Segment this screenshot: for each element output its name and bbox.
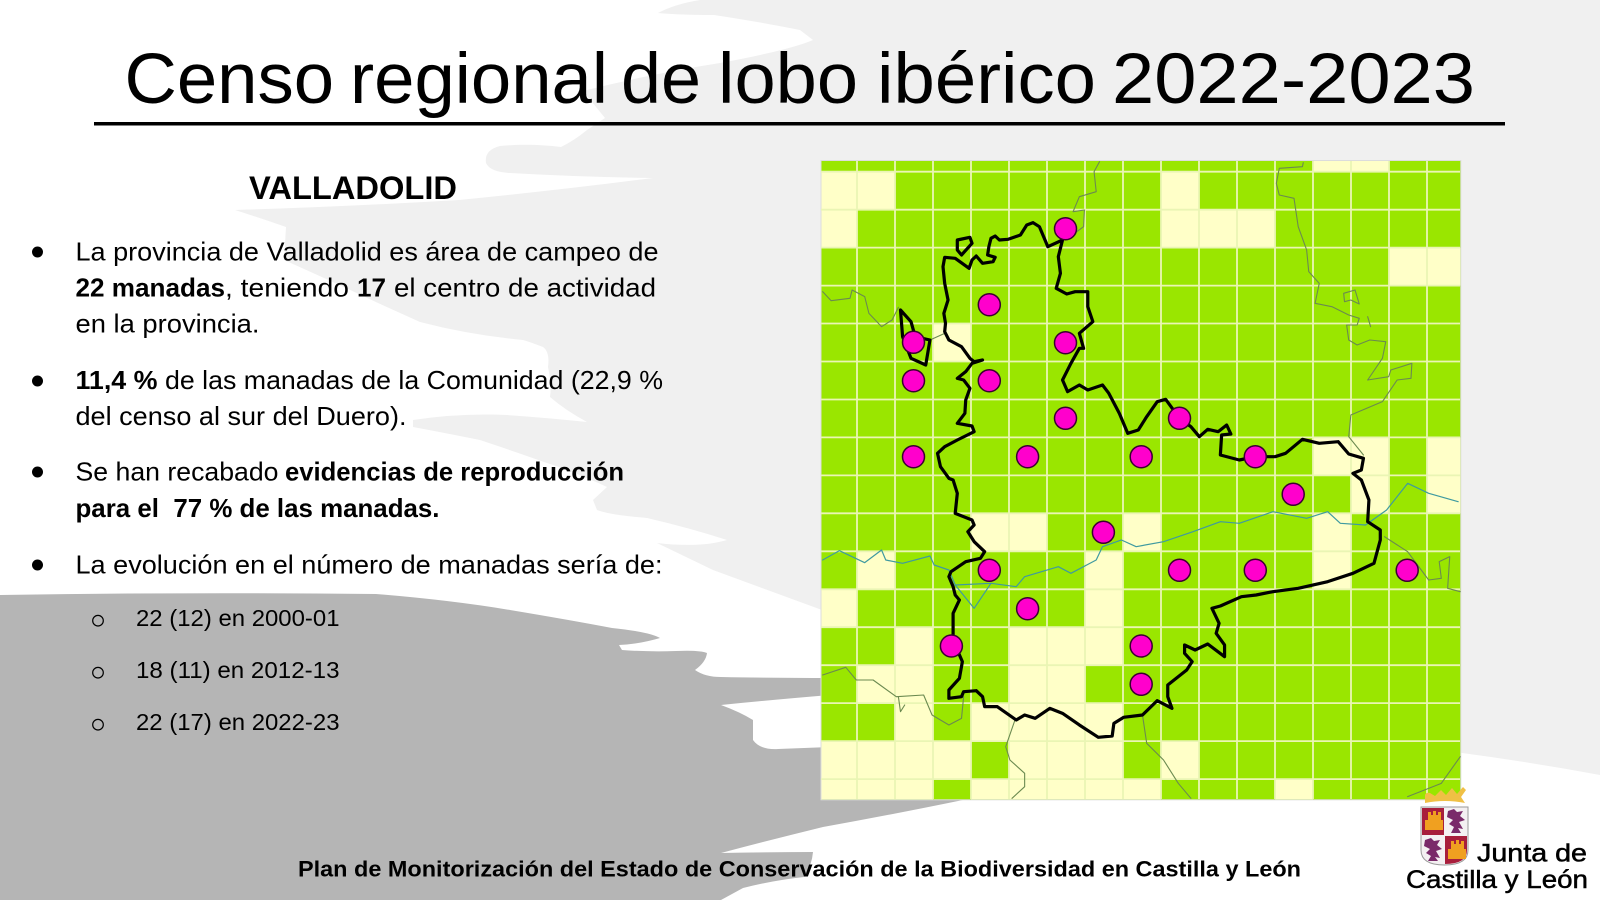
- bullet 1: área de campeo: el centro de actividad: [394, 272, 656, 302]
- footer text: Plan de Monitorización del Estado de Conservación de la Biodiversidad en Castilla y León: [298, 856, 1301, 882]
- heading: Valladolid: VALLADOLID: [249, 170, 457, 206]
- title: de: [621, 40, 701, 119]
- bullet 1: área de campeo: [32, 236, 658, 338]
- bullet 1: área de campeo: La provincia de Valladolid es área de campeo de: [76, 236, 658, 266]
- wolf pack markers: [902, 218, 1418, 695]
- pale grid cells: [822, 161, 1460, 799]
- bullet 4: evolución: La evolución en el número de manadas sería de:: [76, 550, 662, 580]
- river Duero: [823, 483, 1458, 608]
- title: 2022-2023: [1112, 40, 1475, 119]
- title: [124, 40, 1475, 119]
- icon: shield: [1421, 807, 1468, 865]
- bullet 2: 11,4 % de las manadas: de las manadas de la Comunidad (22,9 %: [165, 365, 663, 395]
- logo text: [1406, 840, 1588, 894]
- map: wolf pack grid of Valladolid: [820, 160, 1461, 800]
- bullet 3: evidencias de reproducción: evidencias de reproducción: [285, 456, 624, 486]
- bullet 1: área de campeo: , teniendo: [225, 272, 349, 302]
- bullet list: [32, 236, 663, 735]
- grid lines: [821, 161, 1460, 799]
- bullet 1: área de campeo: 22 manadas: [76, 272, 225, 302]
- bullet 1: área de campeo: 17: [357, 272, 386, 302]
- sub-bullet 2000-01: 22 (12) en 2000-01: [136, 605, 340, 631]
- bullet 3: evidencias de reproducción: Se han recabado: [76, 456, 278, 486]
- bullet 2: 11,4 % de las manadas: 11,4 %: [76, 365, 158, 395]
- Valladolid province border: [900, 223, 1380, 737]
- bullet 3: evidencias de reproducción: para el 77 % de las manadas.: [76, 493, 440, 523]
- logo text: Castilla y León: [1406, 866, 1588, 894]
- title: lobo: [718, 40, 858, 119]
- bullet 1: área de campeo: en la provincia.: [76, 308, 260, 338]
- neighbouring province borders: [823, 162, 1460, 798]
- logo: Junta de Castilla y León: [1406, 787, 1588, 894]
- icon: crown: [1425, 787, 1466, 803]
- title: ibérico: [877, 40, 1096, 119]
- logo text: Junta de: [1477, 840, 1587, 868]
- bullet 2: 11,4 % de las manadas: [32, 365, 663, 431]
- title: Censo: [124, 40, 334, 119]
- sub-bullet 2022-23: 22 (17) en 2022-23: [136, 709, 340, 735]
- sub-bullet 2012-13: 18 (11) en 2012-13: [136, 657, 340, 683]
- bullet 3: evidencias de reproducción: [32, 456, 624, 523]
- title: regional: [350, 40, 608, 119]
- bullet 2: 11,4 % de las manadas: del censo al sur del Duero).: [76, 401, 406, 431]
